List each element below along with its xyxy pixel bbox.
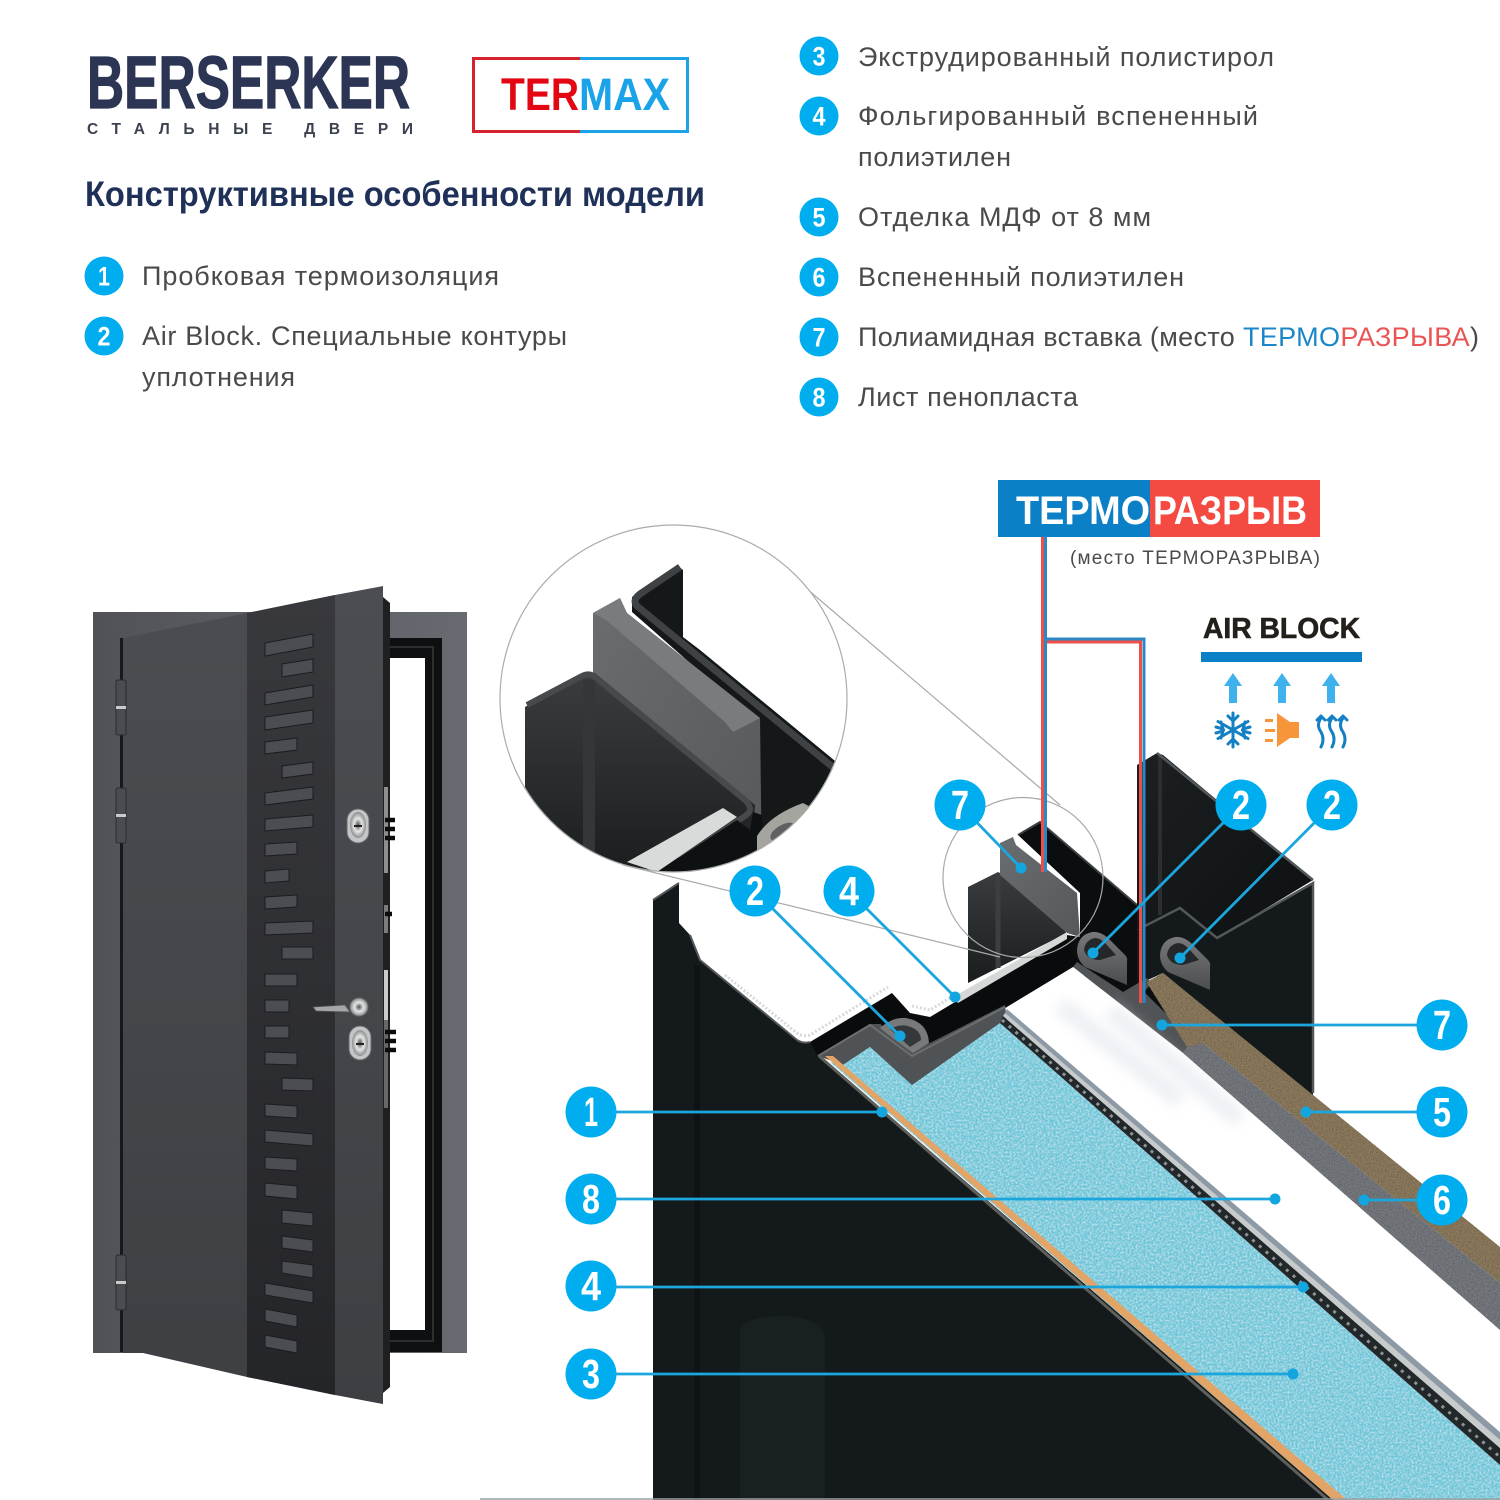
air block title: AIR BLOCK bbox=[1203, 613, 1360, 645]
cork gray edge bbox=[819, 1056, 1327, 1499]
legend item 1: 1 bbox=[98, 262, 110, 292]
layer 8: foam sheet bbox=[1007, 967, 1500, 1432]
legend item 8 bbox=[800, 378, 1079, 416]
legend item 3: 3 bbox=[812, 42, 826, 72]
zoom: back rail bbox=[632, 565, 835, 848]
right panel edges bbox=[1143, 753, 1313, 1093]
icon: orange barrier bbox=[1265, 713, 1299, 747]
legend item 4: Фольгированный вспененный bbox=[858, 101, 1258, 131]
legend item 3: Экструдированный полистирол bbox=[858, 42, 1274, 72]
zoom: seal bbox=[757, 803, 808, 850]
back wall fold bbox=[1158, 756, 1162, 915]
thermal break lines bbox=[1042, 537, 1144, 1003]
magnifier connector lines bbox=[623, 583, 1060, 957]
legend item 6: 6 bbox=[812, 262, 826, 292]
lower lock bbox=[349, 1026, 371, 1060]
door illustration bbox=[93, 586, 467, 1404]
door frame bbox=[93, 612, 467, 1353]
door dark vertical panel bbox=[247, 595, 335, 1395]
logo: TERMAX: MAX bbox=[579, 69, 670, 120]
legend item 4: 4 bbox=[812, 102, 826, 132]
callout 7: top bbox=[934, 780, 1026, 874]
legend item 7: Полиамидная вставка (место ТЕРМОРАЗРЫВА) bbox=[858, 322, 1479, 352]
callout 3 bbox=[566, 1348, 1298, 1400]
seal C bbox=[880, 1018, 929, 1053]
legend item 2: уплотнения bbox=[142, 362, 295, 392]
zoom: fin top light bbox=[593, 598, 760, 732]
layer 4: foil strip light bbox=[1003, 1013, 1500, 1448]
legend item 5: Отделка МДФ от 8 мм bbox=[858, 202, 1151, 232]
upper lock bbox=[347, 809, 369, 843]
logo: TERMAX bbox=[474, 58, 688, 132]
callout 1: 1 bbox=[584, 1089, 598, 1135]
foil strip bbox=[953, 932, 1067, 1003]
callout 6 bbox=[1358, 1174, 1468, 1226]
zoom: front U bbox=[525, 673, 755, 880]
callout 2: middle seal: 2 bbox=[1232, 782, 1250, 828]
panel hinge bump bbox=[740, 1316, 825, 1500]
legend item 8: 8 bbox=[812, 382, 826, 412]
callout 4: bottom bbox=[566, 1260, 1308, 1312]
legend item 4 bbox=[800, 96, 1258, 172]
frame opening with seal bbox=[120, 638, 442, 1352]
thermal break subtitle: (место ТЕРМОРАЗРЫВА) bbox=[1070, 548, 1320, 569]
base line bbox=[480, 1498, 1500, 1500]
U fold bbox=[996, 873, 1000, 968]
frame rim bbox=[818, 1007, 1005, 1056]
door leaf bbox=[123, 586, 383, 1404]
gray inner frame bbox=[818, 1005, 1007, 1086]
callout 2: middle seal bbox=[1088, 780, 1266, 958]
air block bar bbox=[1201, 652, 1362, 662]
legend item 6 bbox=[800, 258, 1184, 296]
zoom: U fold bbox=[583, 680, 595, 852]
layer 3: extruded polystyrene bbox=[830, 1023, 1500, 1500]
logo: BERSERKER bbox=[87, 41, 413, 138]
air block arrows bbox=[1224, 673, 1340, 703]
inner black channel bbox=[810, 935, 1077, 1056]
callout 8: 8 bbox=[582, 1176, 600, 1222]
legend item 2 bbox=[84, 316, 567, 392]
layer 4: foil strip dark bbox=[1000, 1016, 1500, 1465]
hinges bbox=[116, 680, 126, 1310]
logo: BERSERKER: BERSERKER bbox=[87, 41, 410, 124]
legend item 1 bbox=[84, 256, 499, 296]
magnified detail circle bbox=[500, 525, 847, 880]
thermal insert dark slot bbox=[1144, 985, 1203, 1044]
callout 2: right seal bbox=[1174, 780, 1358, 964]
zoom: U rim bbox=[527, 674, 750, 860]
legend item 5 bbox=[800, 198, 1151, 236]
door cross-section bbox=[480, 753, 1500, 1500]
callout 4: bottom: 4 bbox=[581, 1263, 601, 1309]
callout 2: right seal: 2 bbox=[1323, 782, 1341, 828]
left U profile bbox=[968, 872, 1067, 983]
door edge bbox=[383, 597, 390, 1393]
logo: TERMAX: TER bbox=[501, 69, 579, 120]
seal B bbox=[1160, 937, 1210, 990]
callout 7: right bbox=[1156, 1000, 1468, 1050]
icon: snowflake bbox=[1216, 713, 1250, 747]
zoom: back rail rim bbox=[635, 567, 835, 769]
legend item 2: 2 bbox=[98, 322, 110, 352]
zoom: polyamide fin bbox=[593, 598, 762, 880]
callout 2: left seal: 2 bbox=[746, 868, 764, 914]
thermal break badge: РАЗРЫВ bbox=[1153, 489, 1307, 533]
callout 6: 6 bbox=[1433, 1177, 1451, 1223]
handle bbox=[313, 998, 368, 1016]
legend item 7: 7 bbox=[812, 322, 826, 352]
foam edge grain bbox=[725, 975, 950, 1036]
seal A bbox=[1077, 932, 1127, 985]
legend item 4: полиэтилен bbox=[858, 142, 1011, 172]
panel fold line bbox=[694, 965, 700, 1500]
layer 5: MDF bbox=[1147, 973, 1500, 1283]
layer 6: gray foam bbox=[1183, 1043, 1500, 1330]
edge hardware bbox=[384, 787, 396, 1108]
zoom: foil bbox=[627, 808, 737, 872]
layer 4: gray-blue strip bbox=[1005, 1009, 1500, 1440]
foam sheet shading bbox=[1060, 1005, 1240, 1120]
callout 3: 3 bbox=[582, 1351, 600, 1397]
foil grain bbox=[1002, 1020, 1500, 1457]
callout 4: top bbox=[824, 866, 960, 1002]
back rail bbox=[1018, 822, 1137, 1003]
thermal break badge: ТЕРМО bbox=[1016, 489, 1150, 533]
icon: heat waves bbox=[1317, 716, 1347, 747]
back rail edge bbox=[1018, 822, 1137, 905]
zoom: seal hole bbox=[770, 822, 793, 840]
callout 8 bbox=[566, 1174, 1280, 1224]
callout 5: 5 bbox=[1433, 1089, 1451, 1135]
callout 1 bbox=[566, 1086, 888, 1138]
outer dark panel bbox=[653, 883, 1333, 1500]
callout 7: top: 7 bbox=[951, 782, 969, 828]
logo: BERSERKER: СТАЛЬНЫЕ ДВЕРИ bbox=[87, 121, 413, 138]
legend item 5: 5 bbox=[812, 202, 826, 232]
polyamide fin bbox=[1000, 837, 1080, 937]
zoom: lower channel bbox=[658, 812, 762, 872]
thermal break badge bbox=[998, 480, 1320, 537]
callout 4: top: 4 bbox=[839, 868, 859, 914]
heading: Конструктивные особенности модели bbox=[85, 175, 705, 214]
layer 1: cork bbox=[825, 1056, 1347, 1500]
callout 5 bbox=[1300, 1086, 1468, 1138]
legend item 8: Лист пенопласта bbox=[858, 382, 1079, 412]
legend item 1: Пробковая термоизоляция bbox=[142, 261, 499, 291]
right front panel bbox=[1137, 883, 1313, 1097]
callout 7: right: 7 bbox=[1433, 1002, 1451, 1048]
legend item 6: Вспененный полиэтилен bbox=[858, 262, 1184, 292]
legend item 3 bbox=[800, 36, 1274, 76]
callout 2: left seal bbox=[730, 866, 906, 1042]
panel edge highlight bbox=[653, 883, 810, 1043]
right back wall bbox=[1137, 753, 1313, 938]
magnifier circle: small bbox=[943, 798, 1103, 958]
lower thermal insert bbox=[1073, 962, 1203, 1053]
legend item 2: Air Block. Специальные контуры bbox=[142, 321, 567, 351]
decorative slots bbox=[265, 634, 313, 1353]
